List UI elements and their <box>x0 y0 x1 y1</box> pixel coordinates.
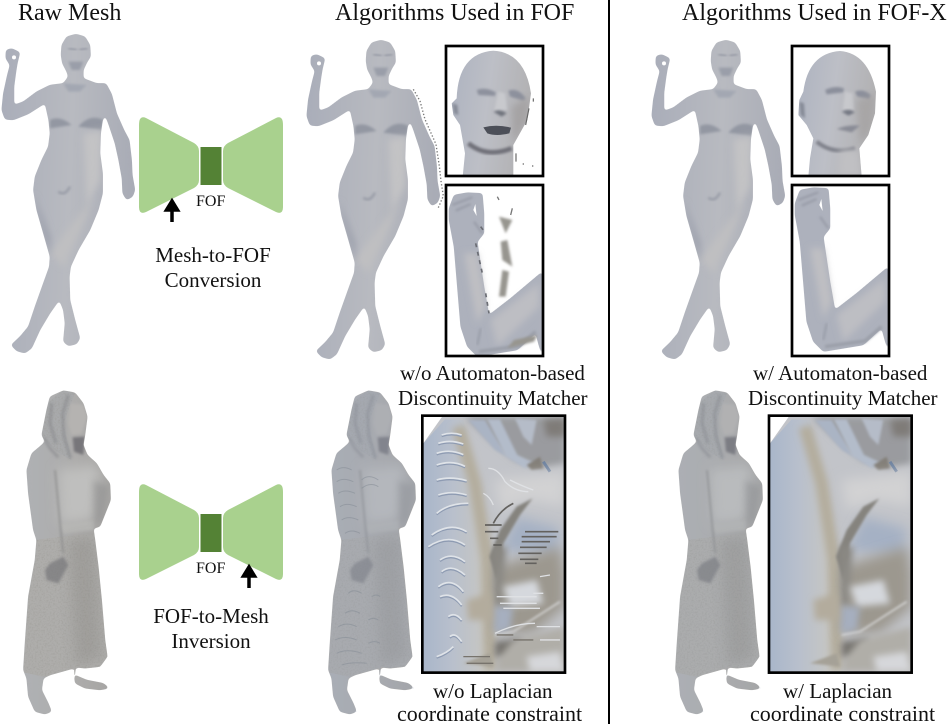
heading: Algorithms Used in FOF: Algorithms Used in FOF <box>335 0 574 26</box>
heading: Raw Mesh: Raw Mesh <box>18 0 121 26</box>
figure: FOF body with artifacts <box>307 40 443 359</box>
heading: Algorithms Used in FOF-X: Algorithms Used in FOF-X <box>682 0 947 26</box>
diagram: FOF-to-mesh encoder-decoder <box>139 484 283 580</box>
arrow: encoder input <box>166 201 178 222</box>
caption: FOF-to-Mesh Inversion: Inversion <box>171 629 251 653</box>
inset: FOF face <box>446 46 543 180</box>
caption: FOF-to-Mesh Inversion: FOF-to-Mesh <box>153 604 269 628</box>
figure: FOF-X body <box>652 40 785 359</box>
figure: FOF-X scan result <box>672 390 763 714</box>
figure: raw scan of clothed person <box>20 390 111 714</box>
caption: Mesh-to-FOF Conversion: Mesh-to-FOF <box>155 243 271 267</box>
caption: w/ Laplacian coordinate constraint: w/ Laplacian <box>783 679 893 703</box>
inset: FOF-X smooth surface detail <box>768 415 912 673</box>
caption: w/ Automaton-based Discontinuity Matcher: Discontinuity Matcher <box>748 386 938 410</box>
inset: FOF arm with artifacts <box>446 185 543 358</box>
diagram: mesh-to-FOF encoder-decoder <box>139 117 283 213</box>
diagram: mesh-to-FOF encoder-decoder: FOF <box>196 193 225 210</box>
arrow: decoder output <box>244 567 254 588</box>
vertical divider <box>608 0 610 724</box>
figure: raw mesh body <box>2 34 135 353</box>
caption: w/o Laplacian coordinate constraint: w/o Laplacian <box>433 679 553 703</box>
caption: Mesh-to-FOF Conversion: Conversion <box>165 268 262 292</box>
caption: w/o Automaton-based Discontinuity Matcher: Discontinuity Matcher <box>398 386 588 410</box>
figure: FOF scan result <box>325 390 416 714</box>
inset: FOF-X face <box>792 46 889 182</box>
diagram: FOF-to-mesh encoder-decoder: FOF <box>196 560 225 577</box>
inset: FOF-X arm <box>792 185 889 356</box>
caption: w/ Automaton-based Discontinuity Matcher: w/ Automaton-based <box>753 361 928 385</box>
caption: w/o Automaton-based Discontinuity Matcher: w/o Automaton-based <box>400 361 585 385</box>
inset: FOF stepped surface detail <box>422 415 566 673</box>
